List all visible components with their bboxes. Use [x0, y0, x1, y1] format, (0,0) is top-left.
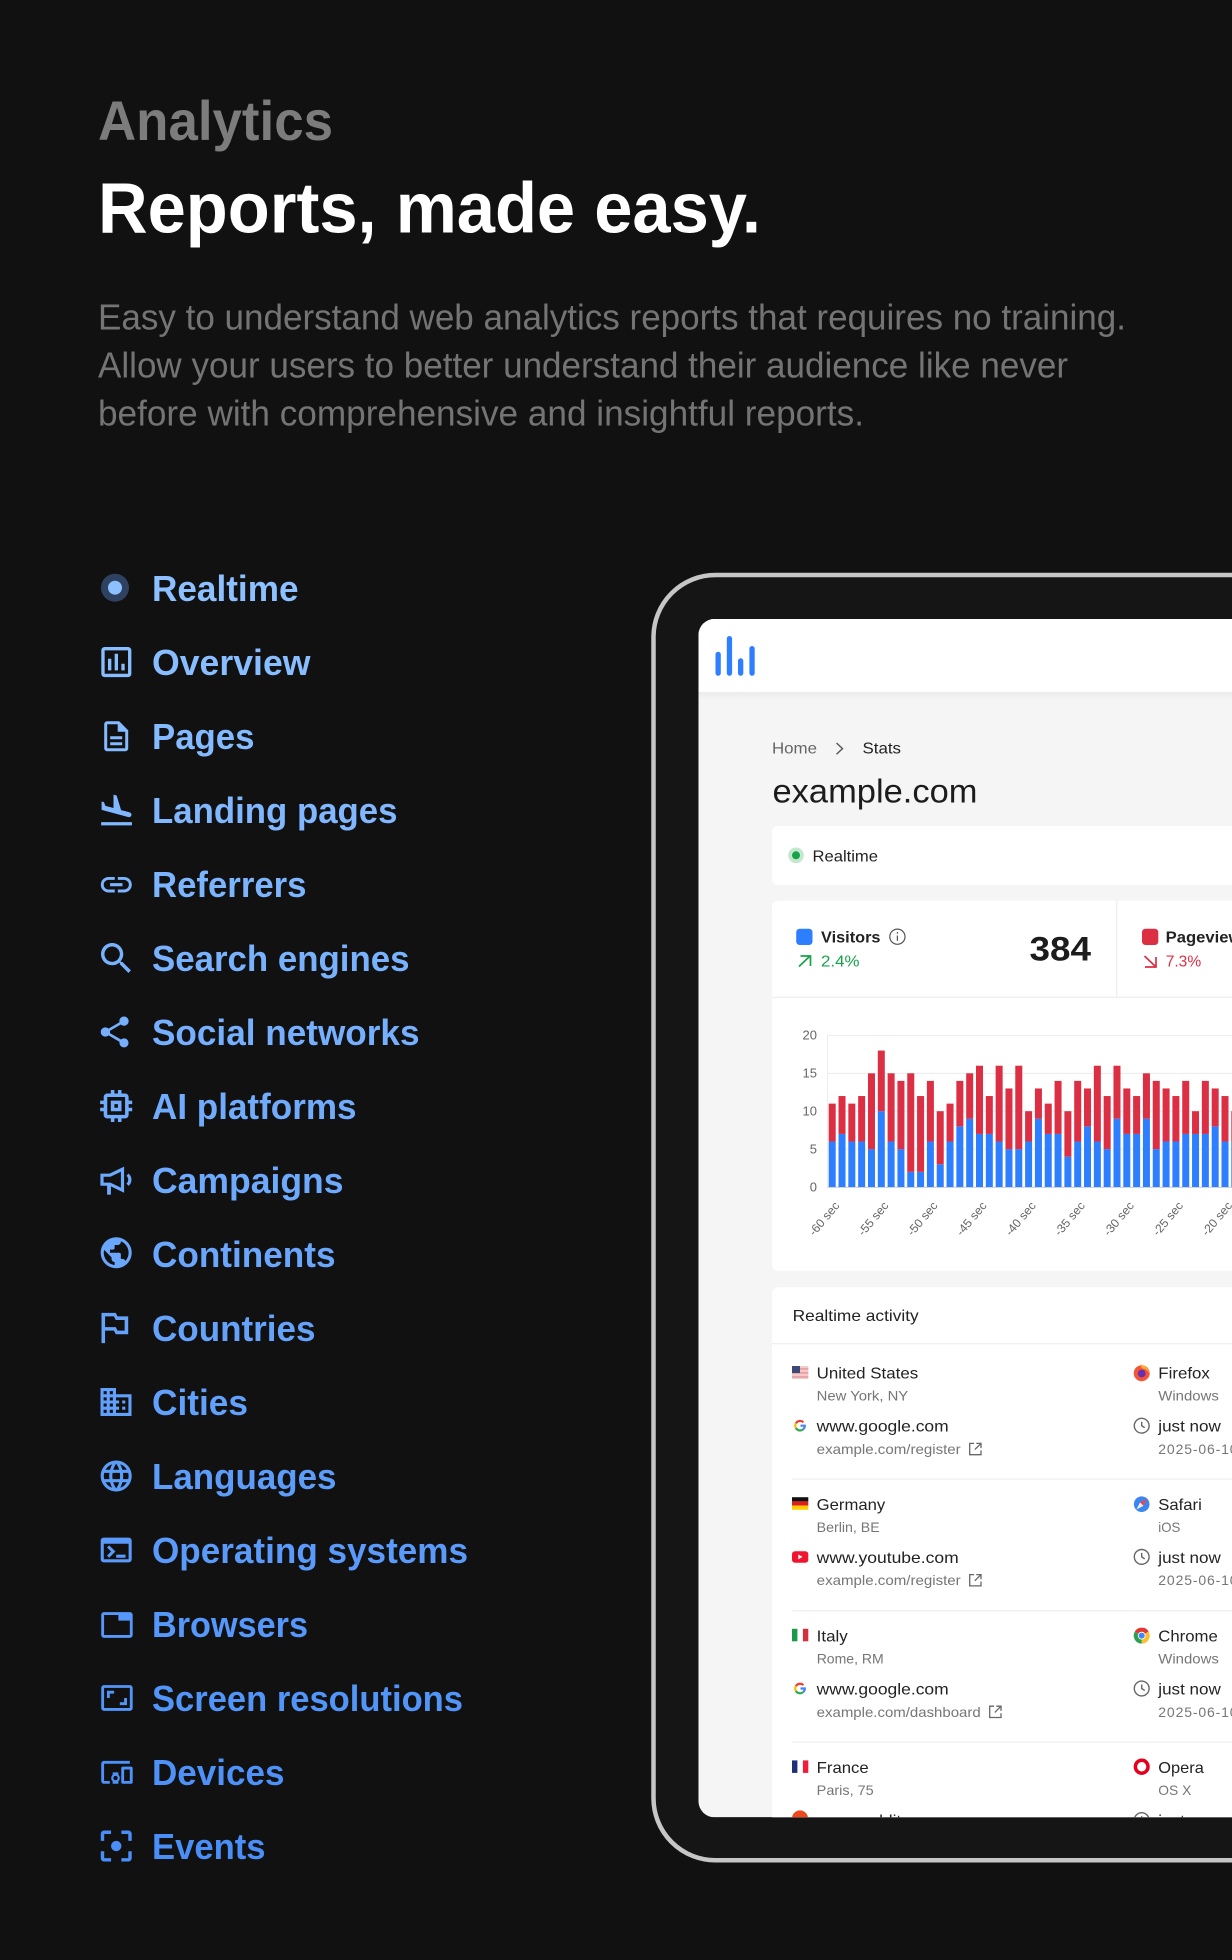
y axis labels and grid [803, 1028, 1232, 1194]
breadcrumb: Home [772, 741, 817, 758]
icon: info [890, 929, 905, 944]
icon: Reddit [792, 1810, 808, 1826]
y axis labels and grid: 10 [803, 1104, 817, 1118]
item: Browsers [101, 1604, 308, 1645]
icon: magnifier [101, 943, 131, 973]
stat: visitors: 384 [1030, 930, 1091, 968]
screen background [698, 619, 1232, 1817]
description paragraph: Allow your users to better understand their audience like never [98, 345, 1068, 386]
activity row: United States [792, 1364, 1232, 1457]
label: Pages: Pages [152, 716, 254, 757]
bars [829, 1051, 1232, 1187]
device screen [698, 619, 1232, 1847]
item: Overview [101, 642, 311, 683]
item: Social networks [101, 1012, 420, 1053]
header block [98, 89, 1126, 433]
x axis labels: -30 sec [1100, 1199, 1137, 1239]
activity row: France: France [817, 1760, 869, 1777]
activity row: Italy: example.com/dashboard [817, 1704, 981, 1720]
activity row: United States: United States [817, 1366, 918, 1383]
activity row: Italy: www.google.com [816, 1681, 949, 1698]
label: Continents: Continents [152, 1234, 336, 1275]
activity row: Italy: Italy [817, 1628, 848, 1645]
icon: clock [1134, 1418, 1149, 1433]
realtime activity card [772, 1287, 1232, 1847]
icon: browser tab [101, 1612, 133, 1638]
activity row: France: www.reddit.com [816, 1813, 939, 1830]
icon: Opera [1135, 1760, 1148, 1773]
item: Screen resolutions [101, 1678, 463, 1719]
icon: Safari [1134, 1496, 1149, 1512]
stacked bar chart: visitors and pageviews [803, 1028, 1232, 1239]
activity row: United States: Windows [1158, 1388, 1219, 1404]
description paragraph [98, 296, 1126, 433]
activity row: United States: example.com/register [817, 1441, 961, 1457]
x axis labels [812, 1203, 1232, 1234]
label: Events: Events [152, 1826, 266, 1867]
icon: flag [102, 1313, 128, 1343]
label: Countries: Countries [152, 1308, 316, 1349]
breadcrumb [773, 742, 900, 755]
icon: language globe [101, 1460, 132, 1492]
activity row: Italy: Rome, RM [817, 1650, 884, 1666]
item: Pages [104, 716, 254, 757]
icon: YouTube [792, 1551, 808, 1563]
x axis labels: -50 sec [904, 1199, 940, 1239]
stat: pageviews: 7.3% [1166, 954, 1201, 971]
icon: terminal [101, 1538, 132, 1562]
device bezel [654, 575, 1232, 1860]
icon: megaphone [102, 1169, 130, 1195]
icon: US flag [792, 1366, 808, 1379]
activity row: Germany: iOS [1158, 1519, 1180, 1535]
icon: Google [795, 1684, 805, 1693]
breadcrumb: Stats [862, 741, 901, 758]
icon: Firefox [1134, 1364, 1150, 1381]
icon: external link [970, 1575, 981, 1586]
item: Search engines [101, 938, 410, 979]
activity row: Germany [792, 1496, 1232, 1588]
icon: buildings [100, 1388, 132, 1416]
label: Devices: Devices [152, 1752, 284, 1793]
icon: Italian flag [792, 1629, 808, 1641]
stat: visitors [796, 929, 1091, 971]
feature navigation list [100, 568, 468, 1867]
label: Campaigns: Campaigns [152, 1160, 344, 1201]
realtime status bar [772, 826, 1232, 885]
activity row: Italy: Windows [1158, 1650, 1219, 1666]
activity row: United States: Firefox [1158, 1366, 1210, 1383]
icon: document [104, 721, 128, 751]
title: Reports, made easy.: Reports, made easy. [98, 170, 761, 249]
series: visitors (blue) [829, 1111, 1232, 1187]
icon: link [101, 877, 132, 892]
item: Operating systems [101, 1530, 468, 1571]
x axis labels: -40 sec [1002, 1199, 1039, 1239]
x axis labels: -55 sec [855, 1199, 891, 1239]
icon: realtime dot [101, 574, 129, 602]
icon: external link [970, 1443, 981, 1455]
icon: plane landing [101, 795, 132, 825]
item: Devices [101, 1752, 284, 1793]
label: Cities: Cities [152, 1382, 248, 1423]
card heading: Realtime activity [793, 1308, 919, 1325]
label: Overview: Overview [152, 642, 311, 683]
activity row: United States: just now [1157, 1419, 1221, 1436]
realtime status bar: Realtime [812, 849, 878, 866]
description paragraph: before with comprehensive and insightful reports. [98, 392, 864, 433]
activity row: France: Opera [1158, 1760, 1204, 1777]
item: Referrers [101, 864, 307, 905]
y axis labels and grid: 5 [810, 1142, 817, 1156]
icon: French flag [792, 1760, 808, 1773]
y axis labels and grid: 20 [803, 1028, 817, 1042]
item: Realtime [101, 568, 298, 609]
item: AI platforms [100, 1086, 356, 1127]
stat: visitors: Visitors [821, 930, 881, 947]
stats and chart card [772, 901, 1232, 1271]
series: pageviews (red) [829, 1051, 1232, 1172]
label: Realtime: Realtime [152, 568, 298, 609]
stat: visitors: 2.4% [821, 954, 860, 971]
activity row: Italy: Chrome [1158, 1628, 1218, 1645]
x axis labels: -35 sec [1051, 1199, 1088, 1239]
activity row: Germany: Germany [817, 1497, 885, 1514]
activity row: Germany: Berlin, BE [817, 1519, 880, 1535]
label: AI platforms: AI platforms [152, 1086, 356, 1127]
label: Languages: Languages [152, 1456, 336, 1497]
eyebrow: Analytics: Analytics [98, 89, 333, 152]
icon: Chrome [1134, 1628, 1150, 1644]
item: Cities [100, 1382, 248, 1423]
label: Screen resolutions: Screen resolutions [152, 1678, 463, 1719]
item: Continents [101, 1234, 336, 1275]
x axis labels: -60 sec [806, 1199, 842, 1239]
icon: clock [1134, 1549, 1149, 1564]
icon: clock [1134, 1813, 1149, 1828]
icon: aspect ratio [101, 1685, 133, 1711]
activity row: France: OS X [1158, 1782, 1192, 1798]
tablet device mockup [654, 575, 1232, 1860]
icon: external link [990, 1706, 1001, 1718]
activity row: Italy: just now [1157, 1681, 1221, 1698]
icon: arrow up right [799, 956, 810, 966]
description paragraph: Easy to understand web analytics reports that requires no training. [98, 296, 1126, 337]
y axis labels and grid: 15 [803, 1066, 817, 1080]
icon: share [101, 1016, 129, 1047]
icon: chip [100, 1090, 132, 1122]
activity row: France: just now [1157, 1813, 1221, 1830]
icon: app logo [716, 636, 755, 676]
icon: green status dot [788, 848, 804, 863]
item: Events [101, 1826, 265, 1867]
icon: clock [1134, 1681, 1149, 1696]
item: Languages [101, 1456, 336, 1497]
icon: devices [101, 1761, 133, 1784]
activity row: Germany: www.youtube.com [816, 1550, 959, 1567]
activity row: United States: New York, NY [817, 1388, 909, 1404]
item: Landing pages [101, 790, 398, 831]
activity row: Italy [792, 1628, 1232, 1720]
app header bar [698, 619, 1232, 700]
activity row: Germany: just now [1157, 1550, 1221, 1567]
label: Search engines: Search engines [152, 938, 410, 979]
activity row: United States: www.google.com [816, 1419, 949, 1436]
label: Operating systems: Operating systems [152, 1530, 468, 1571]
x axis labels: -45 sec [953, 1199, 990, 1239]
activity row: France: Paris, 75 [817, 1782, 874, 1798]
y axis labels and grid: 0 [810, 1180, 817, 1194]
item: Countries [102, 1308, 316, 1349]
stat: pageviews [1142, 929, 1232, 971]
label: Referrers: Referrers [152, 864, 306, 905]
label: Landing pages: Landing pages [152, 790, 398, 831]
site title: example.com [772, 772, 978, 810]
item: Campaigns [102, 1160, 344, 1201]
activity row: Germany: Safari [1158, 1497, 1202, 1514]
activity row: France [792, 1760, 1221, 1830]
label: Social networks: Social networks [152, 1012, 420, 1053]
icon: German flag [792, 1497, 808, 1510]
label: Browsers: Browsers [152, 1604, 308, 1645]
icon: bar chart box [101, 647, 131, 677]
x axis labels: -25 sec [1150, 1199, 1186, 1239]
icon: Google [795, 1421, 805, 1430]
icon: globe filled [101, 1237, 132, 1268]
icon: focus target [101, 1831, 132, 1862]
icon: arrow down right [1144, 956, 1156, 967]
activity row: Germany: example.com/register [817, 1572, 961, 1588]
